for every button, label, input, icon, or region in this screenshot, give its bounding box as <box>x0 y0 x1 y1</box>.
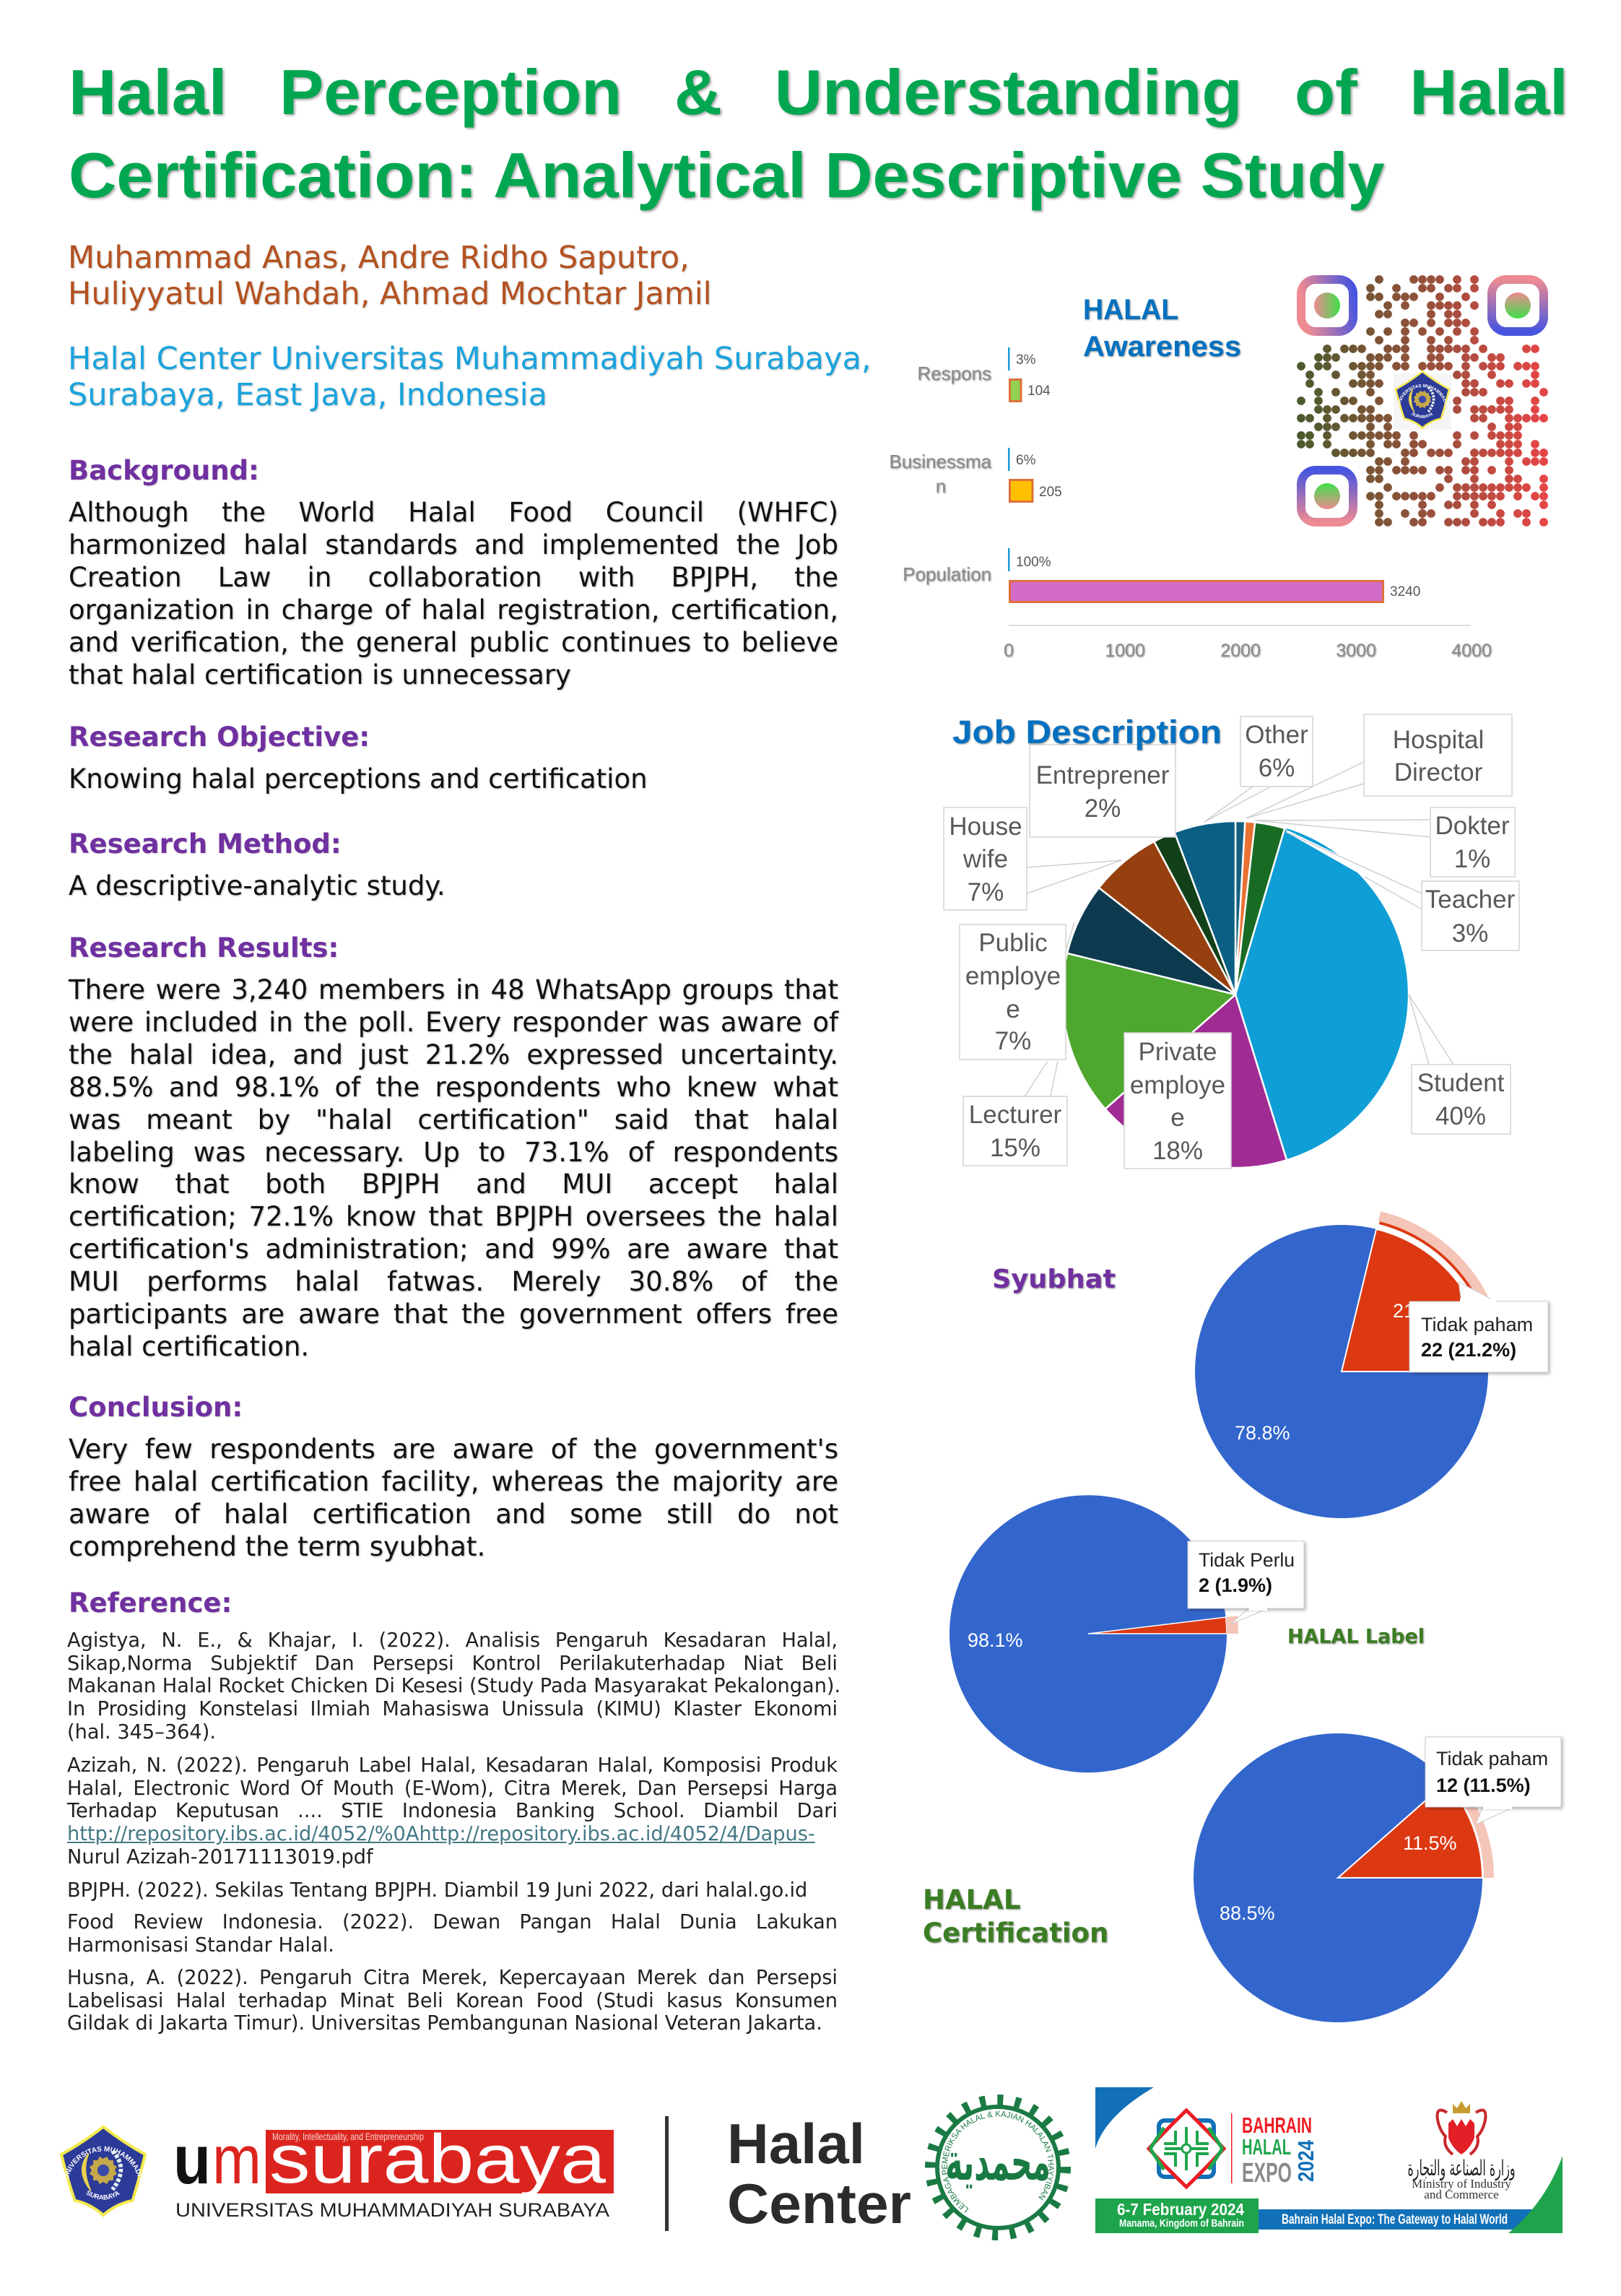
tooltip: Tidak paham 12 <box>1425 1737 1561 1824</box>
category labels <box>889 363 992 585</box>
text: background: organization in charge of halal registration, certification, <box>69 594 838 625</box>
axis tick labels <box>1004 641 1492 661</box>
bar value labels: 100% <box>1016 555 1051 570</box>
text: research results: know that both BPJPH and MUI accept halal <box>69 1169 838 1200</box>
logo: UMSurabaya emblem: UNIVERSITAS MUHAMMADIYAH <box>65 2146 142 2180</box>
reference: Husna: Labelisasi Halal terhadap Minat Beli Korean Food (Studi kasus Konsumen <box>67 1990 838 2012</box>
label: House wife <box>944 807 1027 910</box>
bar value labels: 3% <box>1016 352 1036 368</box>
logo: Halal Center wordmark: Halal <box>727 2112 865 2175</box>
text: background: that halal certification is unnecessary <box>69 659 571 690</box>
bar value labels: 205 <box>1039 485 1062 500</box>
bar value labels: 104 <box>1027 384 1051 399</box>
label: House wife: House <box>949 813 1022 841</box>
label: Public employee: e <box>1006 995 1020 1023</box>
authors <box>68 240 712 312</box>
logo: um surabaya wordmark: m <box>212 2121 261 2198</box>
logo: um surabaya wordmark <box>173 2120 614 2221</box>
label: Hospital Director: Hospital <box>1393 726 1484 754</box>
reference: Azizah: Nurul Azizah-20171113019.pdf <box>67 1846 373 1868</box>
label: Public employee: 7% <box>995 1027 1031 1055</box>
tooltip: Tidak paham 12: Tidak paham <box>1436 1748 1548 1769</box>
label: Entreprener: 2% <box>1085 794 1121 823</box>
reference: Azizah: http://repository.ibs.ac.id/4052/%0Ahttp://repository.ibs.ac.id/4052/4/Dapus- <box>67 1823 815 1845</box>
reference: Azizah: Terhadap Keputusan .... STIE Indonesia Banking School. Diambil Dari <box>67 1800 838 1822</box>
QR finder: top right <box>1492 280 1544 332</box>
tooltip: Tidak paham 22: Tidak paham <box>1421 1314 1533 1335</box>
heading: research method: Research Method: <box>69 828 342 859</box>
text: research results: were included in the poll. Every responder was aware of <box>69 1007 838 1038</box>
banner: Bahrain Halal Expo: HALAL <box>1242 2134 1291 2159</box>
label: Public employee <box>960 924 1066 1060</box>
logo: um surabaya wordmark: Morality, Intellectuality, and Entrepreneurship <box>272 2131 424 2142</box>
text: background: harmonized halal standards and implemented the Job <box>69 529 838 560</box>
pie chart: Syubhat: 21.2% <box>1393 1300 1448 1322</box>
banner: Bahrain Halal Expo: BAHRAIN <box>1242 2113 1312 2138</box>
reference: Agistya: Makanan Halal Rocket Chicken Di Kesesi (Study Pada Masyarakat Pekalongan). <box>67 1675 840 1697</box>
pie chart: job description <box>1025 762 1453 1168</box>
logo: um surabaya wordmark: u <box>173 2121 211 2198</box>
text: research results: was meant by "halal certification" said that halal <box>69 1104 838 1135</box>
title: Halal Perception & Understanding of Halal <box>69 56 1568 128</box>
banner: Bahrain Halal Expo: and Commerce <box>1424 2188 1499 2201</box>
logo: Halal Center wordmark: Center <box>727 2172 911 2235</box>
label: Private employee <box>1124 1033 1231 1169</box>
tooltip: Tidak Perlu: Tidak Perlu <box>1199 1549 1295 1571</box>
authors: Huliyyatul Wahdah, Ahmad Mochtar Jamil <box>68 276 712 312</box>
reference: Azizah: Halal, Electronic Word Of Mouth (E-Wom), Citra Merek, Dan Persepsi Harga <box>67 1777 838 1800</box>
label: Entreprener: Entreprener <box>1036 761 1170 789</box>
label: Hospital Director: Director <box>1394 758 1483 787</box>
percentage bars <box>1008 347 1009 571</box>
heading: reference: Reference: <box>69 1587 232 1619</box>
QR code <box>1297 275 1548 527</box>
tooltip: Tidak paham 12: 12 (11.5%) <box>1436 1775 1531 1796</box>
label: Student: Student <box>1417 1069 1505 1097</box>
reference: Agistya: Agistya, N. E., & Khajar, I. (2022). Analisis Pengaruh Kesadaran Halal, <box>67 1629 838 1652</box>
banner: Bahrain Halal Expo: Manama, Kingdom of Bahrain <box>1119 2217 1244 2230</box>
label: House wife: 7% <box>968 878 1004 906</box>
axis tick labels: 1000 <box>1105 641 1145 661</box>
heading: Syubhat: Syubhat <box>992 1265 1116 1294</box>
text: research results: halal certification. <box>69 1331 309 1362</box>
logo: LPH KHT Muhammadiyah <box>925 2094 1071 2240</box>
QR finder: top left <box>1301 280 1353 332</box>
reference: Agistya: In Prosiding Konstelasi Ilmiah Mahasiswa Unissula (KIMU) Klaster Ekonomi <box>67 1698 838 1720</box>
label: Private employee: 18% <box>1152 1137 1203 1165</box>
heading: HALAL Awareness <box>1083 294 1241 363</box>
heading: HALAL Certification: HALAL <box>923 1884 1020 1915</box>
text: research objective: Knowing halal perceptions and certification <box>69 763 648 794</box>
reference: Husna: Gildak di Jakarta Timur). Universitas Pembangunan Nasional Veteran Jakarta. <box>67 2012 822 2035</box>
logo: Halal Center wordmark <box>727 2112 911 2235</box>
text: background: Creation Law in collaboration with BPJPH, the <box>69 562 838 593</box>
heading: research results: Research Results: <box>69 932 339 963</box>
axis tick labels: 3000 <box>1336 641 1376 661</box>
expo emblem <box>1149 2110 1224 2187</box>
label: Lecturer: 15% <box>990 1134 1040 1162</box>
text: conclusion <box>69 1434 839 1563</box>
pie chart: HALAL Label <box>949 1495 1233 1772</box>
reference: Food Review <box>67 1911 838 1957</box>
category labels: Respons <box>917 363 991 384</box>
text: research results: There were 3,240 members in 48 WhatsApp groups that <box>69 974 838 1005</box>
heading: HALAL Label: HALAL Label <box>1287 1624 1425 1648</box>
label: Private employee: Private <box>1139 1038 1217 1066</box>
logo: UMSurabaya emblem <box>59 2125 147 2217</box>
text: background <box>69 497 839 692</box>
banner: Bahrain Halal Expo: EXPO <box>1242 2158 1292 2188</box>
text: research results <box>68 974 840 1362</box>
label: Other: 6% <box>1259 754 1295 782</box>
banner: Bahrain Halal Expo <box>1095 2087 1563 2233</box>
bar value labels <box>1016 352 1420 599</box>
axis tick labels: 0 <box>1004 641 1014 661</box>
text: research results: certification's administration; and 99% are aware that <box>69 1234 838 1265</box>
bar chart: respondents <box>889 347 1492 661</box>
affiliation: Halal Center Universitas Muhammadiyah Surabaya, <box>68 341 872 377</box>
label: Hospital Director <box>1364 714 1512 796</box>
pie chart: Syubhat: 78.8% <box>1235 1422 1290 1444</box>
text: conclusion: comprehend the term syubhat. <box>69 1531 485 1562</box>
QR centre emblem: SURABAYA <box>1412 412 1433 418</box>
bar value labels: 6% <box>1016 453 1036 468</box>
heading: HALAL Certification <box>923 1884 1108 1949</box>
logo: LPH KHT Muhammadiyah: LEMBAGA PEMERIKSA HALAL & KAJIAN HALALAN THAYYIBAN <box>942 2110 1054 2213</box>
pie chart: Syubhat <box>1195 1216 1501 1518</box>
label: Teacher <box>1422 881 1519 950</box>
reference: Husna: Husna, A. (2022). Pengaruh Citra Merek, Kepercayaan Merek dan Persepsi <box>67 1967 838 1989</box>
pie chart: HALAL Certification: 11.5% <box>1403 1832 1457 1854</box>
pie chart: HALAL Certification: 88.5% <box>1220 1902 1275 1924</box>
label: Entreprener <box>1030 745 1175 837</box>
category labels: Businessma <box>889 451 992 472</box>
text: research results: labeling was necessary. Up to 73.1% of respondents <box>69 1137 838 1168</box>
text: background: Although the World Halal Food Council (WHFC) <box>69 497 838 528</box>
label: Private employee: e <box>1170 1104 1185 1132</box>
count bars <box>1009 380 1383 602</box>
label: Dokter <box>1430 807 1515 877</box>
affiliation <box>68 341 872 413</box>
tooltip: Tidak Perlu: 2 (1.9%) <box>1199 1574 1272 1596</box>
heading: Job Description: Job Description <box>952 714 1222 750</box>
label: House wife: wife <box>962 845 1008 873</box>
logo: um surabaya wordmark: UNIVERSITAS MUHAMMADIYAH SURABAYA <box>175 2199 609 2221</box>
text: research results: the halal idea, and just 21.2% expressed uncertainty. <box>69 1039 838 1070</box>
reference: Azizah <box>66 1754 838 1868</box>
axis tick labels: 4000 <box>1451 641 1492 661</box>
reference: Azizah: Azizah, N. (2022). Pengaruh Label Halal, Kesadaran Halal, Komposisi Produk <box>67 1754 838 1777</box>
label: Student <box>1412 1065 1511 1134</box>
logo: LPH KHT Muhammadiyah: محمدية <box>945 2132 1051 2192</box>
banner: Bahrain Halal Expo: 2024 <box>1293 2139 1318 2182</box>
label: Public employee: employe <box>965 962 1061 990</box>
tooltip: Tidak Perlu <box>1188 1541 1304 1624</box>
authors: Muhammad Anas, Andre Ridho Saputro, <box>68 240 690 276</box>
heading: background: Background: <box>69 455 259 486</box>
banner: Bahrain Halal Expo: وزارة الصناعة والتجارة <box>1407 2156 1516 2180</box>
reference: Agistya: Sikap,Norma Subjektif Dan Persepsi Kontrol Perilakuterhadap Niat Beli <box>67 1652 838 1675</box>
label: Private employee: employe <box>1130 1071 1225 1099</box>
bar value labels: 3240 <box>1390 584 1420 599</box>
label: Lecturer: Lecturer <box>969 1101 1062 1129</box>
heading: HALAL Awareness: HALAL <box>1083 294 1178 326</box>
text: conclusion: Very few respondents are aware of the government's <box>69 1434 838 1465</box>
pie chart: HALAL Label: 98.1% <box>968 1629 1023 1651</box>
reference: Agistya <box>67 1629 840 1743</box>
tooltip: Tidak paham 22 <box>1409 1282 1548 1372</box>
label: Dokter: Dokter <box>1435 812 1510 840</box>
text: research results: participants are aware that the government offers free <box>69 1299 838 1330</box>
text: research results: MUI performs halal fatwas. Merely 30.8% of the <box>69 1266 838 1297</box>
text: research results: 88.5% and 98.1% of the respondents who knew what <box>69 1072 838 1103</box>
pie chart: HALAL Certification <box>1194 1733 1489 2022</box>
title: Certification: Analytical Descriptive Study <box>69 139 1385 211</box>
category labels: n <box>936 475 946 497</box>
title <box>69 56 1568 214</box>
banner: Bahrain Halal Expo: 6-7 February 2024 <box>1117 2200 1244 2219</box>
text: background: and verification, the general public continues to believe <box>69 627 838 658</box>
reference: BPJPH: BPJPH. (2022). Sekilas Tentang BPJPH. Diambil 19 Juni 2022, dari halal.go.id <box>67 1879 807 1902</box>
reference: Food Review: Harmonisasi Standar Halal. <box>67 1934 334 1957</box>
axis tick labels: 2000 <box>1220 641 1261 661</box>
coat of arms <box>1438 2101 1485 2154</box>
banner: Bahrain Halal Expo: Bahrain Halal Expo: The Gateway to Halal World <box>1282 2212 1508 2227</box>
label: Student: 40% <box>1435 1102 1486 1130</box>
label: Lecturer <box>963 1096 1067 1166</box>
reference: Food Review: Food Review Indonesia. (2022). Dewan Pangan Halal Dunia Lakukan <box>67 1911 838 1933</box>
leader lines <box>1025 762 1453 1096</box>
text: conclusion: free halal certification facility, whereas the majority are <box>69 1466 838 1497</box>
text: research method: A descriptive-analytic study. <box>69 870 446 901</box>
label: Public employee: Public <box>978 929 1048 957</box>
QR centre emblem <box>1394 371 1451 430</box>
reference: Husna <box>67 1967 838 2035</box>
tooltip: Tidak paham 22: 22 (21.2%) <box>1421 1339 1516 1361</box>
label: Dokter: 1% <box>1454 845 1490 873</box>
label: Teacher: 3% <box>1452 919 1488 948</box>
heading: HALAL Certification: Certification <box>923 1918 1108 1949</box>
label: Other: Other <box>1245 721 1308 749</box>
text: research results: certification; 72.1% know that BPJPH oversees the halal <box>69 1201 838 1232</box>
heading: HALAL Awareness: Awareness <box>1083 331 1241 363</box>
text: conclusion: aware of halal certification and some still do not <box>69 1499 838 1530</box>
QR finder: bottom left <box>1301 470 1353 522</box>
QR centre emblem: UNIVERSITAS MUHAMMADIYAH <box>1397 384 1448 406</box>
logo: um surabaya wordmark: surabaya <box>269 2120 607 2198</box>
label: Teacher: Teacher <box>1425 885 1516 914</box>
affiliation: Surabaya, East Java, Indonesia <box>68 377 547 413</box>
logo: UMSurabaya emblem: SURABAYA <box>87 2191 120 2200</box>
heading: conclusion: Conclusion: <box>69 1392 243 1423</box>
heading: research objective: Research Objective: <box>69 722 370 753</box>
reference: Agistya: (hal. 345–364). <box>67 1721 216 1743</box>
category labels: Population <box>903 563 991 585</box>
banner: Bahrain Halal Expo: Ministry of Industry <box>1412 2177 1511 2191</box>
label: Other <box>1240 716 1313 787</box>
